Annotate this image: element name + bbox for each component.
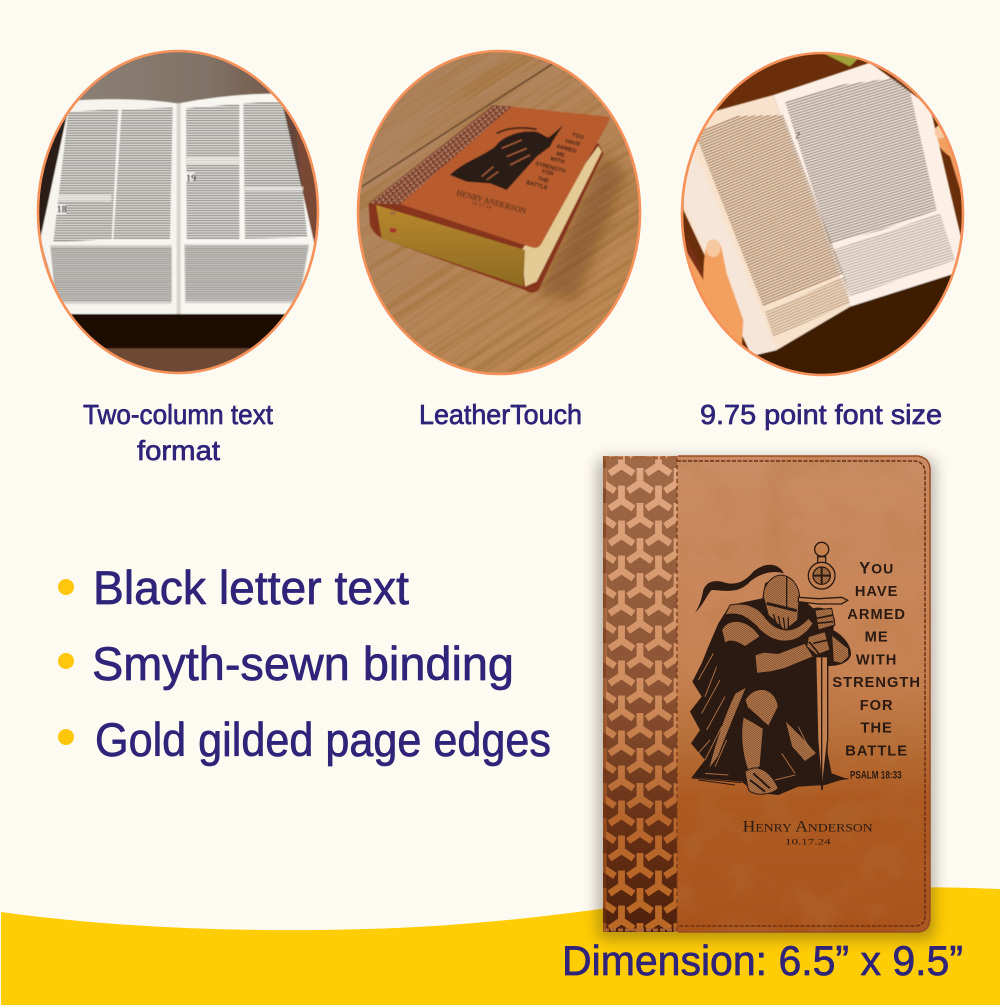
cover verse text: ARMED (847, 607, 906, 623)
left page (683, 95, 850, 356)
bullet list (58, 561, 551, 766)
photo circle: leather book on wood: YOU (571, 132, 585, 141)
photo circle: leather book on wood: HAVE (564, 138, 581, 148)
left page (40, 99, 178, 314)
right page (773, 63, 962, 307)
photo circle: leather book on wood (359, 52, 639, 373)
photo circle: leather book on wood: HENRY ANDERSON (455, 188, 527, 216)
left hand (683, 239, 743, 350)
photo circle: leather book on wood: FOR (541, 169, 554, 178)
cover verse text: THE (861, 721, 893, 737)
book shadow (597, 458, 935, 940)
photo circle: open bible two-column (39, 52, 317, 372)
knight engraving (690, 542, 851, 795)
large book cover (603, 456, 930, 932)
cover (400, 107, 609, 248)
photo circle: leather book on wood: 10.17.24 (471, 200, 493, 210)
photo circle: open bible two-column: 19 (186, 173, 196, 184)
caption: leathertouch: LeatherTouch (419, 399, 582, 430)
photo circle: leather book on wood: ARMED (555, 144, 577, 155)
caption: two-column text format: Two-column text (83, 399, 273, 430)
cover verse text: WITH (856, 652, 897, 668)
oval outlines (38, 51, 963, 375)
bottom cover (369, 143, 603, 292)
cover verse text: BATTLE (845, 743, 908, 759)
cover verse text: YOU (859, 558, 894, 577)
cover verse text: 10.17.24 (785, 836, 832, 846)
photo circle: hands holding open bible: 2 (795, 131, 800, 141)
cover verse text: FOR (860, 698, 894, 714)
page block (522, 146, 602, 287)
bullet list: Black letter text (93, 561, 409, 614)
cover verse text: STRENGTH (832, 675, 921, 691)
sword (798, 542, 848, 790)
plume (695, 565, 784, 613)
right page (178, 93, 317, 314)
caption: two-column text format (83, 399, 273, 466)
photo circle: leather book on wood: BATTLE (525, 180, 548, 192)
right hand (935, 128, 960, 193)
photo circle: leather book on wood: THE (537, 176, 550, 185)
cover verse text (743, 558, 921, 846)
silhouette (690, 575, 851, 795)
photo circle: leather book on wood: STRENGTH (534, 161, 566, 175)
cover verse text: PSALM 18:33 (850, 769, 902, 781)
cover verse text: HAVE (855, 584, 898, 600)
bullet list: Gold gilded page edges (95, 713, 551, 766)
helmet detail (748, 577, 833, 792)
yellow wave band (1, 887, 1000, 1005)
photo circle: leather book on wood: WITH (549, 156, 565, 166)
cover verse text: ME (865, 630, 889, 646)
bullet list: Smyth-sewn binding (92, 637, 514, 690)
photo circle: leather book on wood: ME (555, 151, 565, 159)
spine panel (603, 456, 677, 932)
cloak strands (698, 653, 808, 780)
armour highlights (708, 575, 849, 794)
dimension label: Dimension: 6.5” x 9.5” (562, 937, 963, 984)
name: HENRY ANDERSON (743, 819, 873, 836)
photo circle: hands holding open bible (683, 54, 962, 374)
photo circle: open bible two-column: 18 (57, 205, 67, 216)
stitching (677, 461, 925, 926)
caption: two-column text format: format (137, 435, 220, 466)
ground strokes (692, 778, 848, 787)
caption: font size: 9.75 point font size (700, 399, 942, 430)
